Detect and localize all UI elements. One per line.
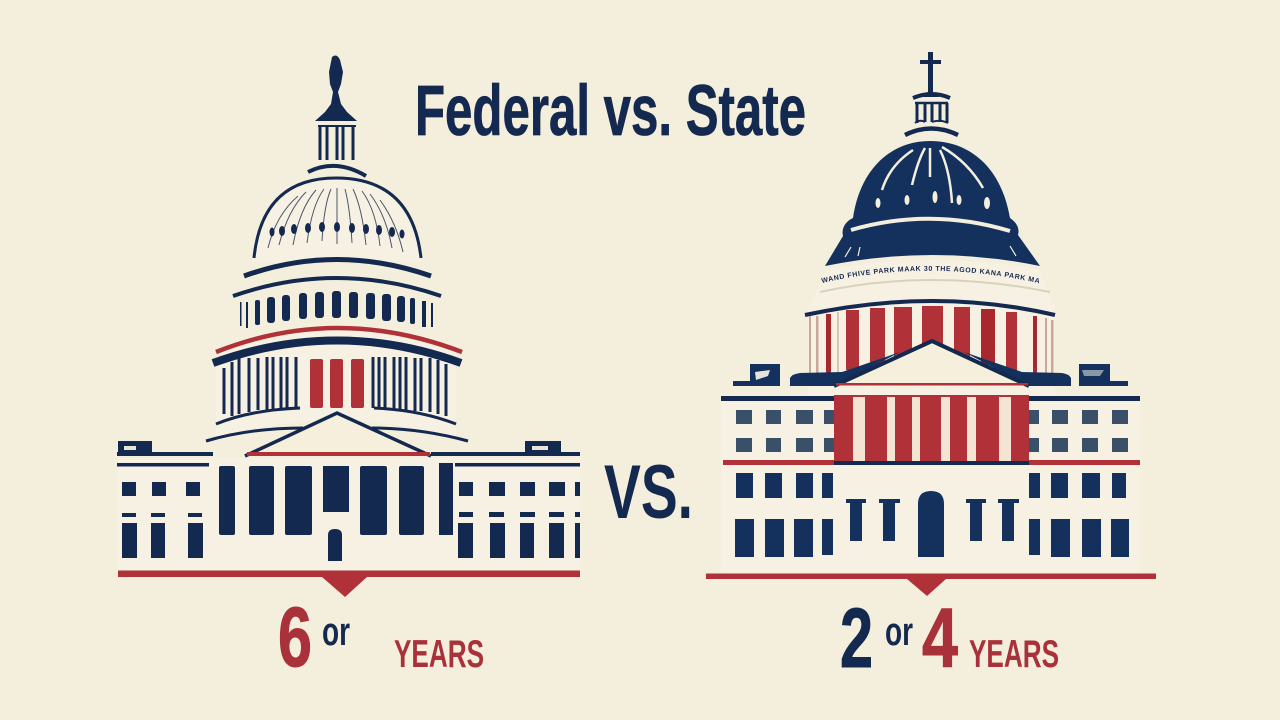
state dome inscription band: WAND FHIVE PARK MAAK 30 THE AGOD KANA PARK MAAK HOME: [821, 266, 1039, 284]
vs label: VS.: [604, 450, 693, 535]
state drum arcs: [805, 280, 1055, 315]
federal dome dots: [270, 222, 404, 238]
federal term label: [278, 590, 484, 684]
federal wing windows: [122, 482, 580, 558]
state term label: YEARS: [969, 633, 1059, 676]
title: Federal vs. State: [415, 72, 806, 151]
federal drum bands: [206, 260, 468, 441]
federal drum windows: [240, 291, 433, 328]
federal base line and pointer: [118, 570, 580, 597]
state term label: 2: [840, 591, 873, 685]
federal portico columns: [219, 463, 453, 561]
state capitol building: [706, 52, 1156, 596]
federal statue: [315, 56, 357, 121]
federal term label: 6: [278, 590, 312, 684]
federal wing rooflines: [117, 441, 580, 466]
state upper windows: [736, 410, 1128, 452]
state pediment: [834, 341, 1029, 386]
state cross: [920, 52, 941, 97]
federal term label: or: [322, 610, 350, 654]
state cornice lines: [721, 396, 1140, 465]
state dome vent marks: [876, 191, 990, 209]
federal capitol building: [117, 56, 580, 597]
state dome highlights: [845, 147, 1016, 257]
state lower windows: [735, 473, 1129, 557]
state entrance columns and door: [846, 491, 1019, 557]
federal lantern: [308, 126, 366, 176]
state base line and pointer: [706, 574, 1156, 596]
state term label: [840, 591, 1059, 685]
federal dome outline and ribs: [254, 178, 421, 258]
state term label: 4: [922, 591, 958, 685]
federal colonnade: [216, 357, 456, 424]
state building body: [721, 260, 1140, 572]
state navy roof: [733, 352, 1128, 386]
federal pediment: [245, 413, 431, 456]
state lantern: [905, 94, 958, 135]
state red portico: [834, 395, 1029, 465]
state dome: [825, 141, 1040, 266]
state drum red columns: [809, 306, 1054, 376]
federal building body: [118, 178, 580, 570]
federal term label: YEARS: [394, 633, 484, 676]
state term label: or: [885, 610, 913, 654]
